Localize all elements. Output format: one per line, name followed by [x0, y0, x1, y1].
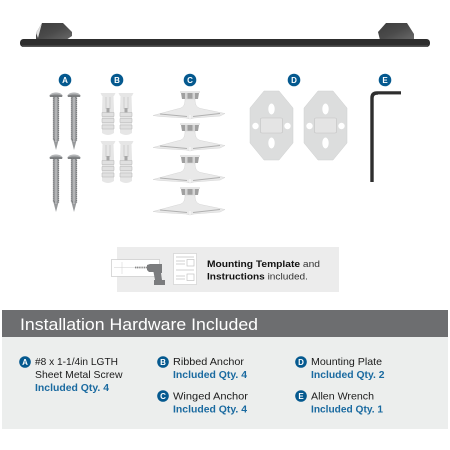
winged anchors [153, 91, 225, 215]
list item D: Mounting Plate [311, 356, 382, 368]
badge D [288, 74, 300, 86]
towel bar with mounts [20, 23, 430, 47]
badge E: E [382, 76, 388, 85]
list item B: B [160, 358, 166, 367]
mounting plates [250, 91, 347, 160]
list item C: C [160, 392, 166, 401]
list item B: Ribbed Anchor [173, 356, 245, 368]
badge A: A [62, 76, 68, 85]
list item D: D [298, 358, 304, 367]
list item C [157, 390, 249, 416]
note text: Mounting Template and [207, 259, 320, 270]
badge C [184, 74, 196, 86]
list item C: Winged Anchor [173, 390, 249, 402]
badge B: B [114, 76, 120, 85]
icon: template with drill [112, 260, 165, 285]
allen wrench [372, 93, 401, 182]
list item C: Included Qty. 4 [173, 404, 247, 416]
heading band: Installation Hardware Included [20, 316, 258, 334]
panel: mounting template note: Instructions included. [207, 272, 308, 282]
heading band [2, 310, 448, 337]
icon: instruction sheet [174, 254, 196, 284]
badge B [111, 74, 123, 86]
panel: hardware list background [2, 337, 448, 429]
list item A: #8 x 1-1/4in LGTH [35, 356, 118, 368]
badge D: D [291, 76, 297, 85]
list item A: Sheet Metal Screw [35, 369, 123, 381]
list item A: A [22, 358, 28, 367]
badge A [59, 74, 71, 86]
badge E [379, 74, 391, 86]
list item D [295, 356, 385, 381]
list item E: E [298, 392, 304, 401]
badge C: C [187, 76, 193, 85]
list item B [157, 356, 247, 381]
list item B: Included Qty. 4 [173, 369, 247, 381]
list item A: Included Qty. 4 [35, 382, 109, 394]
list item A [19, 356, 123, 394]
panel: mounting template note [112, 247, 339, 292]
list item E [295, 390, 383, 416]
list item E: Allen Wrench [311, 390, 374, 402]
ribbed anchors [100, 93, 134, 183]
screws [50, 92, 80, 212]
list item D: Included Qty. 2 [311, 369, 385, 381]
list item E: Included Qty. 1 [311, 404, 383, 416]
